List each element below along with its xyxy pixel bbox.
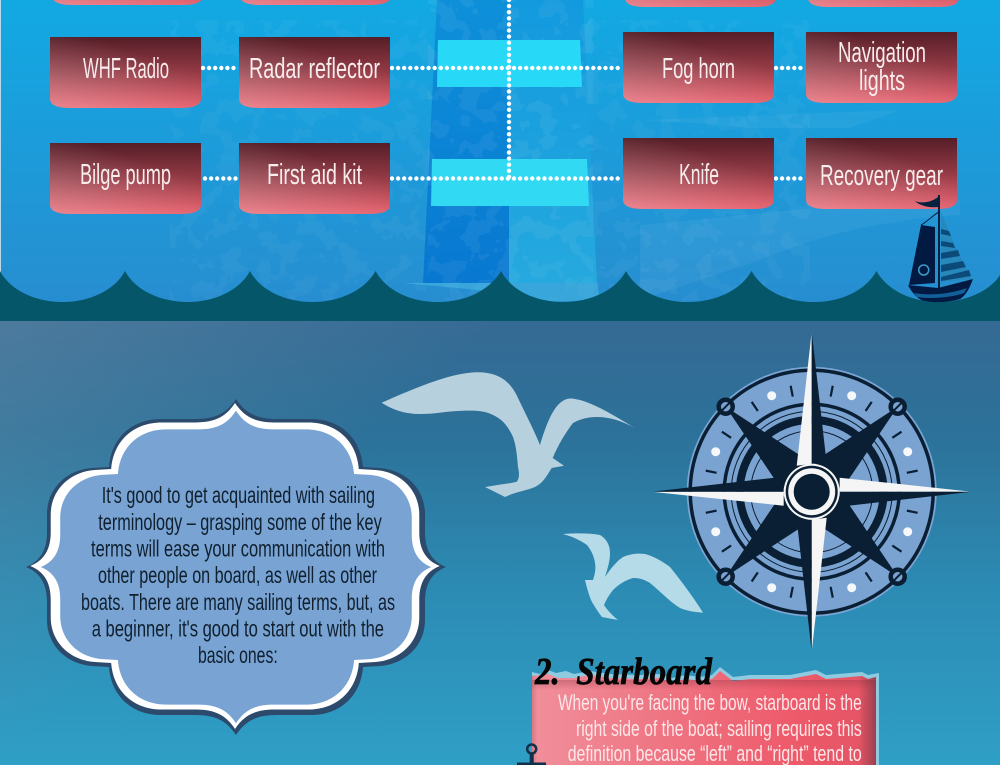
box: cut-off top right 2 <box>808 0 959 7</box>
panel: lower background <box>0 321 1000 765</box>
box: Navigation lights: Navigation <box>838 37 926 69</box>
panel text: When you're facing the bow, starboard is the <box>558 690 862 715</box>
compass ticks <box>706 386 918 598</box>
box: cut-off top left 2 <box>240 0 391 5</box>
box: cut-off top left 1 <box>52 0 203 5</box>
panel torn border <box>532 667 879 765</box>
lighthouse <box>403 0 600 302</box>
plaque frame <box>26 399 446 735</box>
panel heading: 2. Starboard <box>534 651 713 693</box>
waves <box>0 271 1000 321</box>
lighthouse light side <box>509 0 597 283</box>
plaque text: other people on board, as well as other <box>98 562 377 588</box>
plaque text <box>81 482 395 668</box>
box: WHF Radio: WHF Radio <box>83 53 169 85</box>
box: Navigation lights <box>806 32 957 103</box>
plaque text: boats. There are many sailing terms, but, as <box>81 589 395 615</box>
lighthouse dark side <box>423 0 509 283</box>
compass dots <box>711 391 912 592</box>
box: Navigation lights: lights <box>859 65 905 97</box>
lighthouse upper band <box>437 40 582 87</box>
plaque: intro text <box>26 399 446 735</box>
panel text <box>558 690 862 765</box>
box: Bilge pump <box>50 143 201 214</box>
plaque text: It's good to get acquainted with sailing <box>102 482 375 508</box>
compass hub <box>784 464 840 520</box>
box: WHF Radio <box>50 37 201 108</box>
box: Bilge pump: Bilge pump <box>80 159 171 191</box>
icon: large seagull <box>382 372 635 497</box>
icon: compass rose <box>652 332 972 652</box>
box: Fog horn: Fog horn <box>662 53 735 85</box>
plaque text: terminology – grasping some of the key <box>98 509 382 535</box>
box: cut-off top right 1 <box>625 0 776 7</box>
lighthouse base <box>403 283 600 302</box>
panel: sea background <box>0 0 1000 321</box>
box: First aid kit: First aid kit <box>267 159 362 191</box>
plaque text: basic ones: <box>198 642 278 668</box>
plaque text: terms will ease your communication with <box>91 536 385 562</box>
lighthouse lower band <box>431 159 589 206</box>
box: Knife <box>623 138 774 209</box>
panel: Starboard <box>532 651 879 765</box>
box: Recovery gear <box>806 138 957 209</box>
box: Radar reflector <box>239 37 390 108</box>
box: First aid kit <box>239 143 390 214</box>
icon: sailboat <box>908 195 973 302</box>
icon: small seagull <box>563 533 703 620</box>
compass diagonal rays <box>726 407 898 577</box>
box: Knife: Knife <box>679 159 719 191</box>
icon: anchor <box>517 744 546 765</box>
box: Fog horn <box>623 32 774 103</box>
box: Radar reflector: Radar reflector <box>249 53 380 85</box>
compass bolts <box>719 400 905 584</box>
dotted connectors <box>203 0 806 178</box>
panel body <box>532 671 876 765</box>
panel text: right side of the boat; sailing requires this <box>576 716 862 741</box>
plaque text: a beginner, it's good to start out with the <box>92 616 384 642</box>
compass main points <box>652 332 972 652</box>
